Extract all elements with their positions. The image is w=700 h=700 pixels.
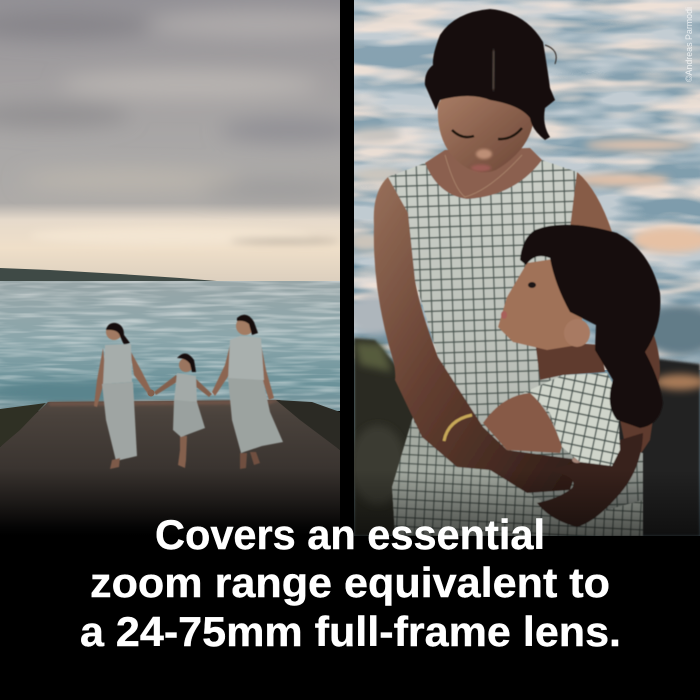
- older girl's left arm: [374, 177, 580, 493]
- little girl's eye: [528, 282, 536, 288]
- bracelet: [444, 415, 472, 441]
- headline line 2: zoom range equivalent to: [90, 559, 610, 606]
- older girl's neck and chest: [425, 148, 542, 199]
- skirt shading: [392, 420, 643, 536]
- left rocks: [0, 403, 46, 447]
- little girl's neck: [535, 340, 605, 380]
- headline line 1: Covers an essential: [155, 511, 545, 558]
- fingernails: [572, 457, 582, 463]
- background rocks, right: [600, 358, 700, 536]
- distant headland: [0, 268, 216, 281]
- older girl's wrapped hand: [537, 433, 643, 527]
- little girl's hair: [520, 225, 663, 428]
- sky with clouds: [0, 0, 370, 282]
- older girl's hair: [425, 9, 555, 140]
- mossy patch: [354, 342, 392, 372]
- soft vignette at bottom of photo: [354, 470, 700, 536]
- soft photo subjects: [374, 9, 663, 536]
- figure: mother: [212, 315, 283, 469]
- figure: older daughter: [94, 323, 152, 469]
- photo credit: ©Andreas Parmodi: [684, 7, 695, 82]
- pier edge: [48, 400, 280, 406]
- lips: [471, 164, 491, 172]
- warm reflection on rocks: [654, 374, 700, 390]
- older girl's right shoulder: [570, 172, 612, 232]
- older girl's far arm behind sister: [620, 335, 660, 453]
- dress tonal shading: [388, 160, 643, 536]
- closed eyes: [452, 128, 522, 139]
- sea: [0, 281, 340, 411]
- little girl's dress: [523, 373, 620, 466]
- older girl's face: [438, 92, 534, 172]
- hair parting: [493, 50, 494, 90]
- figure: little girl: [154, 353, 212, 468]
- little girl's ear: [564, 319, 590, 347]
- headline line 3: a 24-75mm full-frame lens.: [80, 608, 621, 655]
- left photo: family walking on pier by the sea: [0, 0, 340, 524]
- necklace: [445, 155, 522, 197]
- hair strand: [545, 45, 556, 64]
- little girl's shoulder: [483, 393, 562, 453]
- right rocks: [276, 400, 340, 450]
- nose: [476, 149, 492, 159]
- right photo: girl hugging her little sister: [349, 0, 700, 536]
- headline: [80, 511, 621, 655]
- older girl's dress: [388, 160, 643, 536]
- lower left boulder: [354, 426, 403, 503]
- little girl's face: [498, 258, 585, 350]
- clasped hands: [148, 390, 154, 396]
- little girl's lips: [501, 311, 507, 319]
- pier ground: [0, 400, 340, 536]
- sea background with warm reflections: [349, 0, 700, 536]
- background rocks, left: [354, 336, 438, 536]
